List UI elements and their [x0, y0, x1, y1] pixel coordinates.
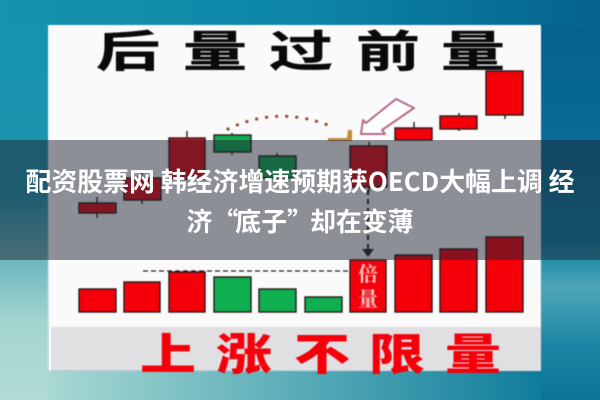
candle 7: [395, 122, 432, 140]
bar label: 倍量: 量: [358, 283, 378, 312]
dotted arc arrow: [228, 116, 352, 141]
headline text: [25, 162, 575, 238]
bar 4 green: [214, 277, 251, 312]
headline text: 济“底子”却在变薄: [186, 202, 414, 238]
caption band: [51, 327, 541, 371]
bar 1: [79, 289, 116, 312]
caption: 上涨不限量: [140, 320, 501, 383]
volume reference line: [143, 270, 350, 272]
title: 后量过前量: 前: [356, 17, 420, 80]
bar 9: [440, 249, 477, 312]
caption: 上涨不限量: 上: [140, 320, 196, 383]
caption: 上涨不限量: 不: [294, 320, 350, 383]
candle 4 green: [214, 133, 251, 155]
headline text: 配资股票网 韩经济增速预期获OECD大幅上调 经: [25, 162, 575, 198]
bar 8: [395, 255, 432, 312]
bar 7 double volume: [350, 260, 386, 312]
candle 2: [124, 172, 161, 204]
caption: 上涨不限量: 涨: [216, 320, 272, 383]
bar label: 倍量: [358, 258, 378, 312]
bar 5 green: [259, 289, 296, 312]
candle 5 green: [259, 153, 296, 182]
bar label: 倍量: 倍: [358, 258, 378, 287]
title: 后量过前量: 量: [441, 17, 505, 80]
title: 后量过前量: 后: [96, 17, 160, 80]
title: 后量过前量: [96, 17, 505, 80]
hollow arrow: [361, 99, 414, 134]
candlesticks: [79, 71, 523, 218]
caption: 上涨不限量: 量: [445, 320, 501, 383]
bar 3: [169, 272, 205, 312]
candle 9: [486, 71, 523, 119]
candle 8: [440, 113, 477, 131]
bar 6 green: [305, 297, 342, 312]
candle 3: [169, 131, 205, 180]
candle 1: [79, 197, 116, 218]
title: 后量过前量: 过: [269, 17, 333, 80]
caption: 上涨不限量: 限: [369, 320, 425, 383]
white chart panel: [48, 25, 541, 371]
bar 2: [124, 282, 160, 312]
volume bars: [79, 237, 523, 312]
bar 10: [486, 237, 523, 312]
headline overlay band: [0, 140, 600, 260]
title: 后量过前量: 量: [183, 17, 247, 80]
dashed down arrow: [362, 190, 374, 257]
candle 6: [350, 142, 387, 192]
